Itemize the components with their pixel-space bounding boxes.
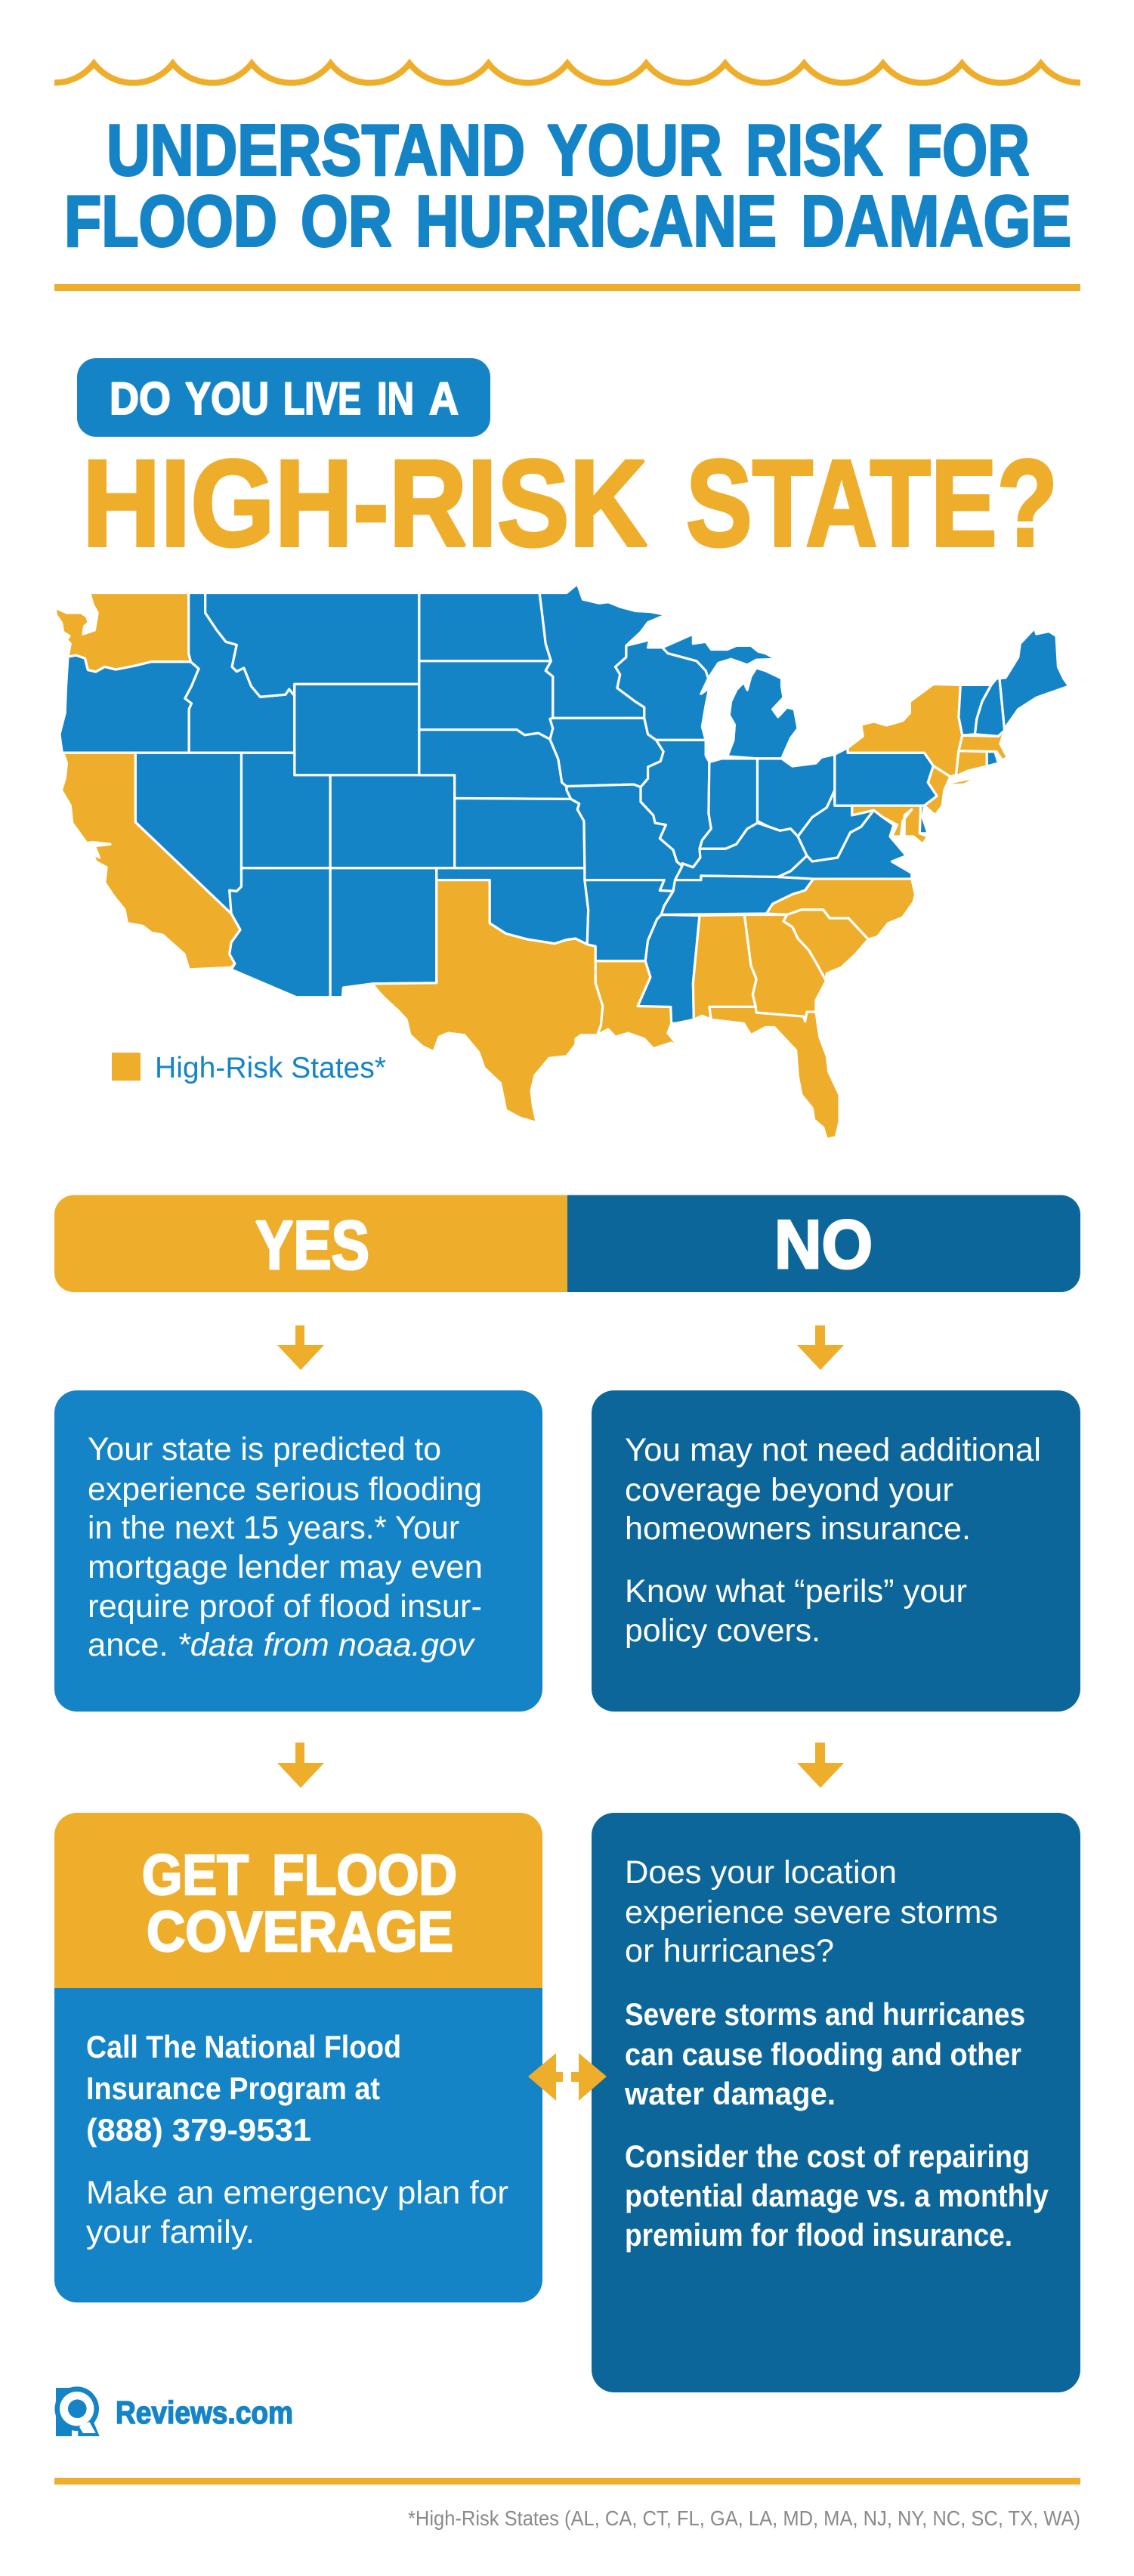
panel heading: COVERAGE: [147, 1900, 453, 1963]
state: South Carolina: [783, 910, 868, 981]
panel: get flood coverage: Call The National Flood: [86, 2029, 401, 2064]
panel: yes explanation: require proof of flood insur-: [88, 1588, 482, 1625]
footer rule: [54, 2478, 1080, 2485]
state: North Dakota: [419, 592, 551, 661]
heading: high-risk state: STATE?: [686, 434, 1058, 572]
title: YOUR: [547, 110, 722, 190]
state: New York: [848, 684, 963, 777]
state: Indiana: [700, 759, 758, 849]
panel header: [54, 1813, 542, 1988]
panel: no explanation: Know what “perils” your: [625, 1573, 967, 1610]
title: OR: [301, 181, 392, 261]
panel: severe storms: premium for flood insurance.: [625, 2217, 1012, 2253]
state: North Carolina: [766, 879, 916, 939]
state: Kansas: [455, 798, 585, 868]
heading: high-risk state: HIGH-RISK: [82, 434, 647, 572]
state: Nevada: [135, 753, 242, 914]
decorative wave header: [54, 63, 1080, 83]
logo wordmark: Reviews.com: [116, 2395, 293, 2430]
logo: Reviews.com: [54, 2386, 293, 2436]
title: RISK: [746, 110, 883, 190]
panel: get flood coverage: (888) 379-9531: [86, 2112, 311, 2148]
panel: severe storms: Consider the cost of repairing: [625, 2138, 1030, 2174]
panel: yes explanation: [54, 1390, 542, 1712]
state: Arizona: [230, 868, 330, 997]
panel: yes explanation: Your state is predicted to: [88, 1431, 441, 1467]
arrow: no down: [797, 1325, 844, 1370]
state: Minnesota: [539, 584, 666, 718]
state: Virginia: [778, 810, 912, 879]
state: Vermont: [959, 685, 991, 735]
title: FOR: [907, 110, 1030, 190]
heading pill: do you live in a: DO: [110, 373, 171, 424]
panel: severe storms: water damage.: [624, 2076, 836, 2111]
panel: get flood coverage: your family.: [86, 2214, 255, 2250]
panel: severe storms: potential damage vs. a monthly: [625, 2178, 1049, 2213]
no segment: [567, 1195, 1080, 1292]
state: Arkansas: [585, 880, 673, 961]
panel: severe storms: experience severe storms: [625, 1894, 998, 1931]
state: Wisconsin: [616, 640, 709, 740]
arrow: yes down: [277, 1325, 324, 1370]
panel heading: FLOOD: [272, 1843, 457, 1906]
panel: severe storms: Does your location: [625, 1854, 897, 1891]
title: HURRICANE: [416, 181, 777, 261]
US map of high-risk states: [55, 584, 1069, 1139]
state: New York Long Island: [951, 777, 978, 785]
panel: no explanation: coverage beyond your: [625, 1472, 953, 1508]
map legend: High-Risk States*: [155, 1052, 386, 1084]
state: Washington: [55, 592, 191, 672]
state: California: [61, 753, 240, 969]
state: Michigan upper peninsula: [663, 634, 776, 679]
state: Alabama: [693, 915, 756, 1019]
state: Georgia: [744, 915, 826, 1022]
state: Illinois: [641, 740, 711, 867]
footnote: *High-Risk States (AL, CA, CT, FL, GA, LA, MD, MA, NJ, NY, NC, SC, TX, WA): [408, 2506, 1080, 2530]
state: Nebraska: [419, 730, 571, 799]
arrow: yes second down: [277, 1743, 324, 1788]
state: Delaware: [919, 806, 928, 833]
panel: severe storms: or hurricanes?: [625, 1933, 834, 1969]
title: DAMAGE: [801, 181, 1071, 261]
state: Massachusetts: [959, 731, 1008, 760]
panel: yes explanation: in the next 15 years.* Your: [88, 1510, 459, 1546]
state: Florida: [709, 1007, 839, 1139]
state: Utah: [242, 753, 330, 868]
state: Colorado: [330, 775, 455, 868]
heading pill: do you live in a: [77, 358, 490, 437]
state: New Mexico: [330, 868, 437, 997]
panel body: [54, 1988, 542, 2302]
panel: severe storms: Severe storms and hurricanes: [625, 1996, 1025, 2032]
state: Pennsylvania: [835, 748, 937, 806]
state: Tennessee: [661, 876, 814, 915]
state: Ohio: [758, 754, 835, 837]
state: Texas: [372, 880, 603, 1123]
panel: no explanation: homeowners insurance.: [625, 1511, 971, 1547]
state: New Jersey: [924, 766, 950, 815]
logo mark: [54, 2386, 100, 2436]
no label: NO: [774, 1207, 873, 1283]
panel: get flood coverage: [54, 1813, 542, 2302]
heading pill: do you live in a: YOU: [185, 373, 269, 424]
state: Connecticut: [955, 751, 987, 777]
panel: yes explanation: experience serious flooding: [88, 1471, 482, 1508]
panel: get flood coverage: Make an emergency plan for: [86, 2175, 508, 2211]
state: Michigan lower peninsula: [728, 668, 798, 759]
yes segment: [54, 1195, 567, 1292]
heading: high-risk state: [82, 434, 1058, 572]
yes / no bar: [54, 1195, 1080, 1292]
panel: no explanation: policy covers.: [625, 1613, 820, 1649]
state: Idaho: [185, 592, 295, 753]
state: Iowa: [550, 718, 663, 787]
double arrow: [528, 2053, 607, 2101]
heading pill: do you live in a: LIVE: [283, 373, 361, 424]
arrow: no second down: [797, 1743, 844, 1788]
yes label: YES: [255, 1208, 369, 1284]
eastern states: [567, 628, 1069, 1139]
state: Missouri: [567, 784, 682, 891]
state: Louisiana: [595, 961, 681, 1049]
title rule: [54, 284, 1080, 291]
state: Rhode Island: [987, 752, 999, 766]
state: Maryland: [852, 806, 928, 844]
panel: yes explanation: ance. *data from noaa.gov: [88, 1627, 476, 1663]
heading pill: do you live in a: IN: [377, 373, 414, 424]
title: FLOOD: [64, 181, 277, 261]
state: Oklahoma: [437, 868, 589, 945]
state: Kentucky: [675, 823, 807, 880]
panel: yes explanation: mortgage lender may even: [88, 1549, 483, 1585]
panel heading: [142, 1843, 457, 1963]
state: Mississippi: [638, 915, 700, 1023]
state: Wyoming: [295, 684, 419, 775]
state: Maine: [1000, 628, 1069, 731]
heading pill: do you live in a: A: [429, 373, 459, 424]
panel: severe storms: [592, 1813, 1080, 2392]
title: UNDERSTAND: [107, 110, 525, 190]
state: South Dakota: [419, 661, 553, 739]
title: [64, 110, 1071, 261]
panel: no explanation: [592, 1390, 1080, 1712]
state: West Virginia: [798, 790, 874, 861]
panel: no explanation: You may not need additional: [625, 1432, 1041, 1468]
panel heading: GET: [142, 1843, 249, 1906]
panel: severe storms: can cause flooding and other: [625, 2036, 1021, 2072]
state: Montana: [205, 592, 419, 697]
panel: get flood coverage: Insurance Program at: [86, 2070, 380, 2106]
state: New Hampshire: [975, 679, 1005, 736]
state: Oregon: [60, 655, 199, 753]
